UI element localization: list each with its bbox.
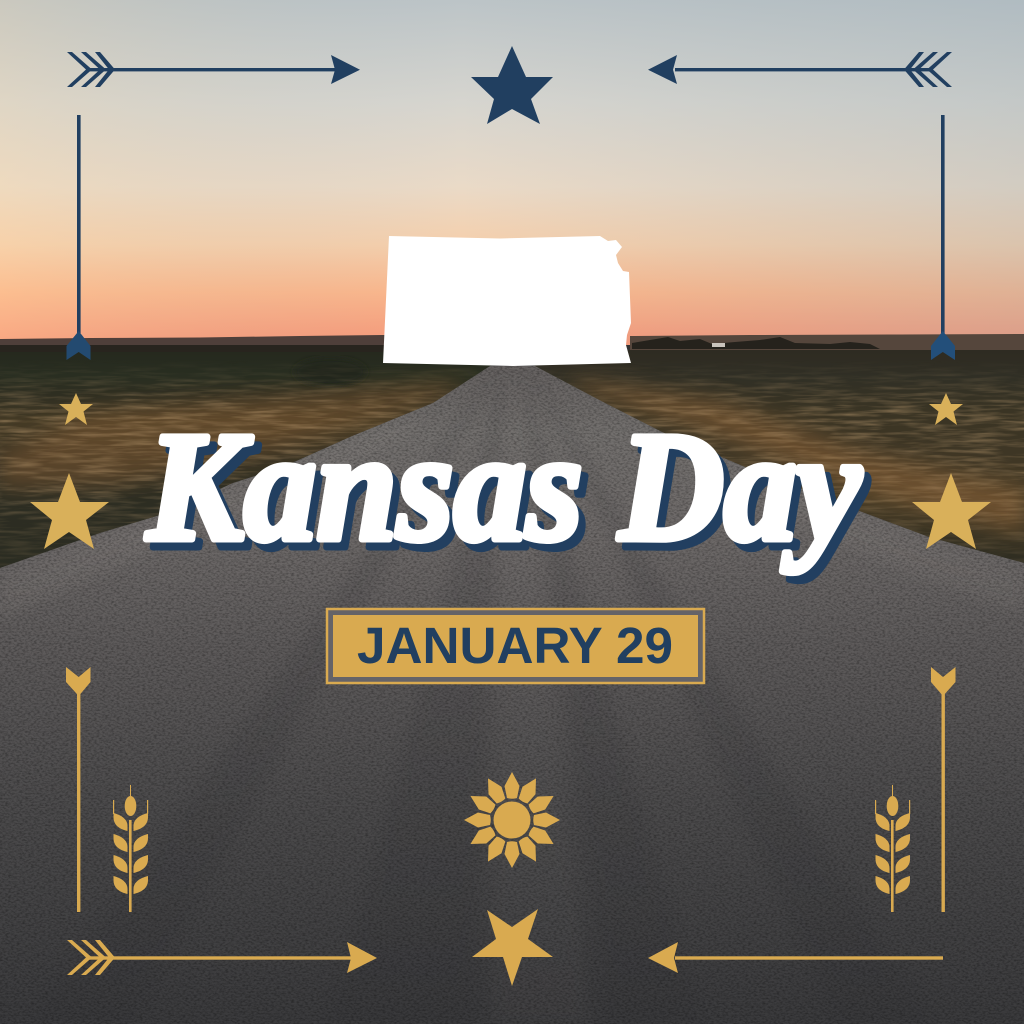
arrow: top right, navy	[648, 52, 952, 87]
horizon tree line	[0, 334, 1024, 353]
arrow: bottom left, gold	[67, 940, 377, 975]
arrow: top left, navy	[67, 52, 360, 87]
star: top navy	[471, 46, 553, 124]
icon: wheat right	[875, 785, 910, 912]
arrow: right side, navy	[931, 115, 955, 360]
film grain	[0, 345, 1024, 1024]
star: large left gold	[30, 473, 109, 549]
icon: wheat left	[113, 785, 148, 912]
arrow: lower left side, gold	[66, 667, 90, 912]
arrow: lower right side, gold	[931, 667, 956, 912]
left field	[0, 352, 495, 568]
arrow: bottom right, gold	[648, 942, 943, 973]
icon: sunflower	[464, 772, 560, 868]
date banner	[327, 609, 704, 683]
star: small left gold	[59, 393, 93, 425]
title: Kansas Day	[145, 400, 869, 581]
gravel road	[0, 366, 1024, 1024]
star: bottom gold inverted	[472, 909, 553, 986]
title lettering: Kansas Day	[145, 400, 862, 573]
arrow: left side, navy	[66, 115, 90, 360]
star: large right gold	[912, 473, 991, 549]
title shadow: Kansas Day	[152, 408, 869, 581]
grass texture	[0, 367, 1024, 566]
date text: JANUARY 29	[357, 617, 673, 674]
star: small right gold	[929, 393, 963, 425]
sky	[0, 0, 1024, 345]
Kansas state silhouette	[383, 236, 631, 366]
right field	[535, 350, 1024, 563]
